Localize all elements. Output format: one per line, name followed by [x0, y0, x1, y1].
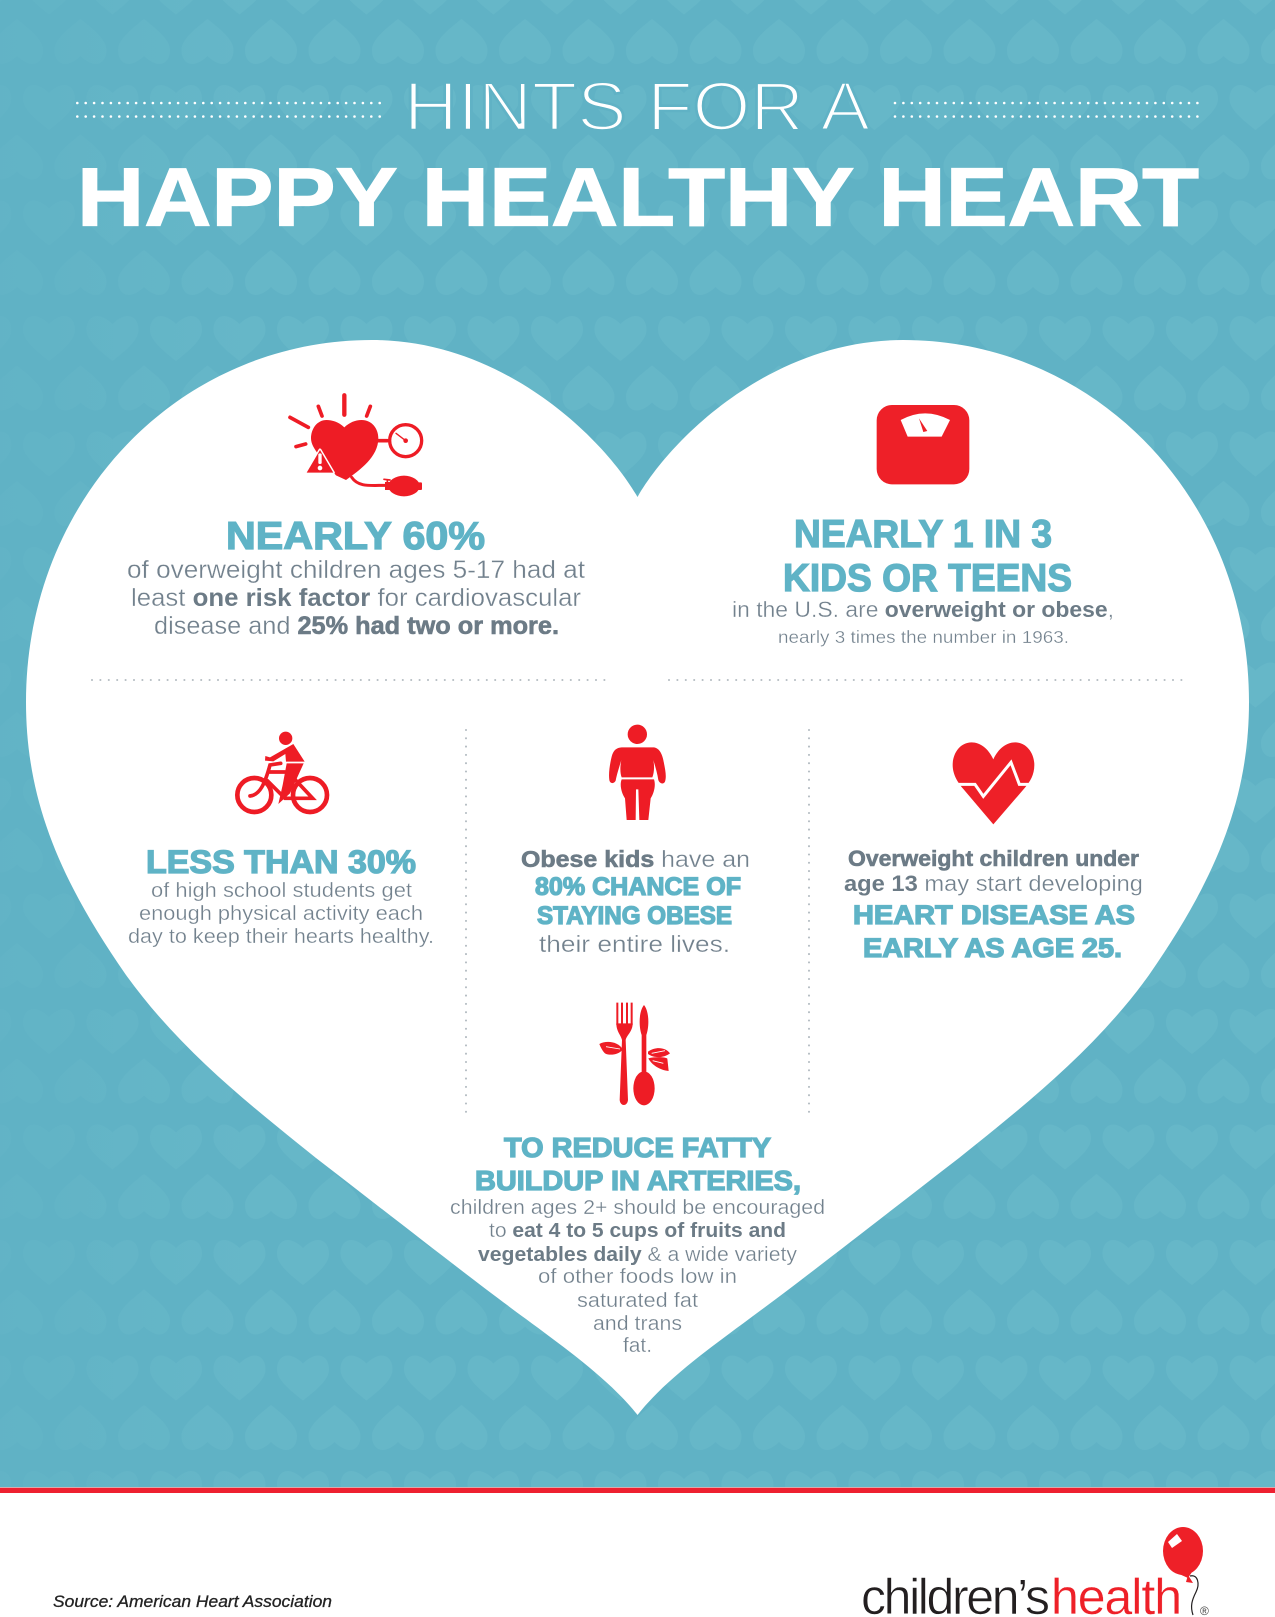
dotted rules beside title: [77, 103, 1201, 116]
red footer band: [0, 1487, 1275, 1493]
title line one: hints for a: HINTS FOR A: [404, 68, 870, 145]
body text: and trans: [593, 1312, 682, 1335]
body text: of other foods low in: [538, 1265, 737, 1288]
body text: day to keep their hearts healthy.: [128, 925, 434, 948]
dotted dividers: [92, 680, 1185, 1113]
panel: nearly 1 in 3: KIDS OR TEENS: [783, 557, 1072, 600]
body text: [450, 1196, 825, 1357]
panel: obese kids: [521, 725, 750, 957]
icon: cyclist: [237, 732, 327, 812]
body text: in the U.S. are overweight or obese ,: [732, 597, 1114, 622]
panel: heart disease: [844, 742, 1143, 963]
body text: enough physical activity each: [139, 902, 423, 925]
body text: Overweight children under: [848, 846, 1139, 871]
highlighted statistic: HEART DISEASE AS: [853, 900, 1135, 930]
body text: of overweight children ages 5-17 had at: [127, 556, 585, 584]
panel: heart disease: EARLY AS AGE 25.: [863, 933, 1122, 963]
body text: children ages 2+ should be encouraged: [450, 1196, 825, 1219]
icon: fork and spoon with leaves: [599, 1003, 670, 1105]
heading: LESS THAN 30%: [146, 844, 416, 880]
panel: reduce fatty buildup: BUILDUP IN ARTERIES,: [475, 1165, 801, 1196]
body text: [127, 556, 585, 640]
heading: NEARLY 60%: [226, 515, 485, 558]
body text: disease and 25% had two or more.: [154, 612, 559, 640]
icon: weighing scale: [877, 405, 969, 484]
body text: least one risk factor for cardiovascular: [131, 584, 581, 612]
logo: children's health: [861, 1527, 1209, 1617]
panel: obese kids: their entire lives.: [539, 931, 730, 957]
heading: TO REDUCE FATTY: [504, 1132, 771, 1163]
icon: overweight person: [609, 725, 666, 820]
body text: saturated fat: [577, 1289, 698, 1312]
panel: obese kids: STAYING OBESE: [537, 902, 732, 930]
panel: less than 30%: [128, 732, 434, 948]
body text: [128, 879, 434, 948]
icon: balloon: [1163, 1527, 1203, 1615]
source note: Source: American Heart Association: [53, 1592, 332, 1611]
body text: to eat 4 to 5 cups of fruits and: [489, 1219, 786, 1242]
title: [77, 68, 1199, 244]
panel: nearly 1 in 3: nearly 3 times the number in 1963.: [778, 627, 1069, 647]
icon: heart with pulse line: [953, 742, 1034, 824]
panel: reduce fatty buildup: [450, 1003, 825, 1357]
body text: of high school students get: [151, 879, 412, 902]
body text: [844, 846, 1143, 896]
highlighted statistic: 80% CHANCE OF: [535, 873, 741, 901]
large white heart panel: [26, 340, 1249, 1415]
icon: heart with blood pressure gauge: [290, 395, 422, 496]
body text: vegetables daily & a wide variety: [478, 1243, 798, 1266]
body text: Obese kids have an: [521, 846, 750, 872]
body text: age 13 may start developing: [844, 871, 1143, 896]
panel: nearly 60%: [127, 395, 585, 640]
heading: NEARLY 1 IN 3: [794, 513, 1052, 556]
body text: fat.: [623, 1334, 652, 1357]
title line two: happy healthy heart: HAPPY HEALTHY HEART: [77, 150, 1199, 244]
panel: nearly 1 in 3: [732, 405, 1114, 647]
